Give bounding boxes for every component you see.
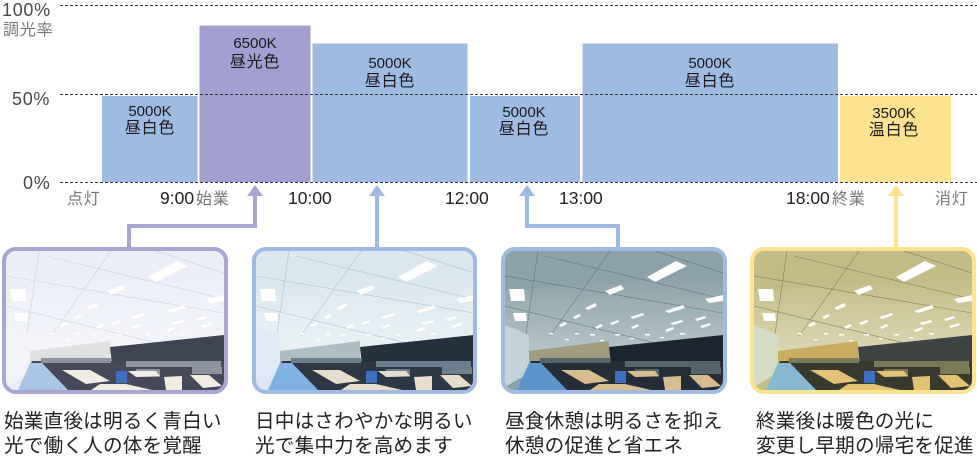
- bar: 5000K before start: [102, 96, 198, 182]
- bar: 5000K before start: 昼白色: [125, 119, 175, 137]
- bar: 5000K late morning: 昼白色: [365, 72, 415, 90]
- bar: 5000K afternoon: 5000K: [688, 55, 732, 72]
- x axis labels: 13:00: [559, 188, 603, 208]
- arrow: morning photo to 始業: [129, 185, 263, 248]
- bar: 5000K afternoon: [582, 44, 838, 182]
- caption: morning: 始業直後は明るく青白い: [4, 410, 222, 432]
- panel: lunch photo: [503, 249, 725, 392]
- caption: lunch: 昼食休憩は明るさを抑え: [505, 410, 723, 432]
- bar: 6500K morning: 昼光色: [230, 53, 280, 71]
- x axis labels: [67, 188, 969, 208]
- bar: 5000K afternoon: 昼白色: [685, 72, 735, 90]
- arrow: daytime photo to bar: [369, 185, 385, 248]
- caption: evening: 終業後は暖色の光に: [756, 410, 934, 432]
- x axis labels: 9:00: [160, 188, 194, 208]
- x axis labels: 12:00: [445, 188, 489, 208]
- y axis labels: 100%: [2, 0, 51, 20]
- caption: daytime: [255, 410, 473, 456]
- bar: 5000K late morning: 5000K: [368, 55, 412, 72]
- caption: morning: [4, 410, 222, 456]
- panel: daytime photo: [254, 249, 475, 392]
- chart: dimming rate schedule: [2, 0, 977, 208]
- caption: evening: [756, 410, 974, 456]
- bar: 3500K after hours: 温白色: [869, 121, 919, 139]
- bar: 5000K lunch: 5000K: [502, 104, 546, 121]
- caption: lunch: [505, 410, 723, 456]
- bar: 6500K morning: 6500K: [233, 35, 277, 52]
- bar: 5000K before start: 5000K: [128, 103, 172, 120]
- panel: morning photo: [4, 249, 226, 392]
- y axis labels: 50%: [12, 89, 50, 109]
- x axis labels: 10:00: [288, 188, 332, 208]
- arrow: lunch photo to bar: [519, 185, 618, 248]
- bar: 3500K after hours: 3500K: [872, 105, 916, 122]
- bar: 6500K morning: [200, 26, 310, 182]
- x axis labels: 点灯: [67, 190, 101, 208]
- x axis labels: 18:00: [786, 188, 830, 208]
- bar: 5000K lunch: 昼白色: [499, 120, 549, 138]
- x axis labels: 終業: [832, 190, 866, 208]
- caption: daytime: 日中はさわやかな明るい: [255, 410, 473, 432]
- x axis labels: 消灯: [935, 190, 969, 208]
- bar: 5000K lunch: [470, 96, 580, 182]
- panel: evening photo: [752, 249, 974, 392]
- y axis labels: 調光率: [3, 21, 53, 39]
- x axis labels: 始業: [196, 190, 230, 208]
- y axis labels: 0%: [23, 173, 50, 193]
- y axis labels: [2, 0, 53, 193]
- bar: 5000K late morning: [312, 44, 468, 182]
- arrow: evening photo to bar: [888, 185, 904, 248]
- bar: 3500K after hours: [840, 96, 951, 182]
